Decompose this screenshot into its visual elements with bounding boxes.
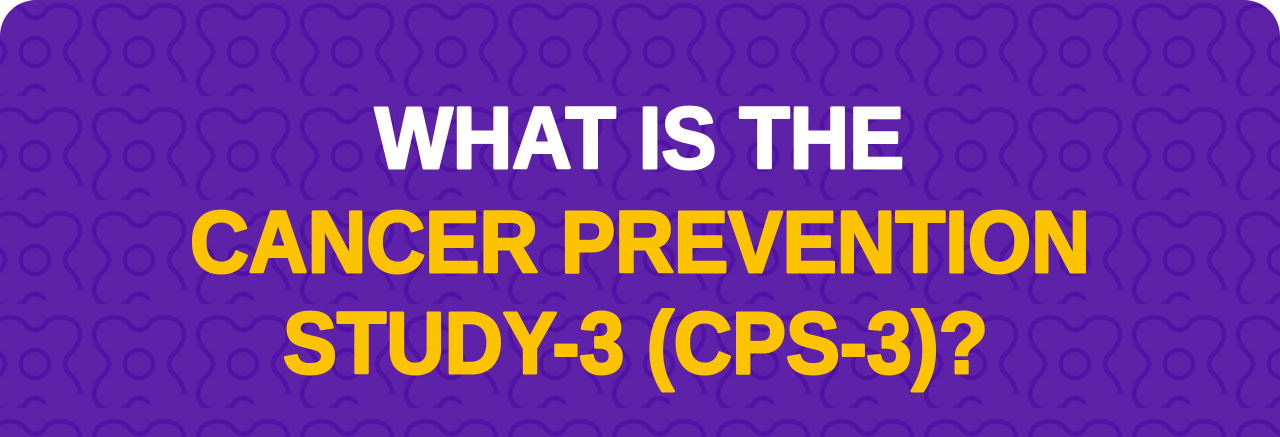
title line 1: WHAT IS THE [375, 90, 904, 187]
title line 2: CANCER PREVENTION [190, 194, 1090, 291]
title [190, 90, 1090, 392]
title line 3: STUDY-3 (CPS-3)? [283, 295, 988, 392]
